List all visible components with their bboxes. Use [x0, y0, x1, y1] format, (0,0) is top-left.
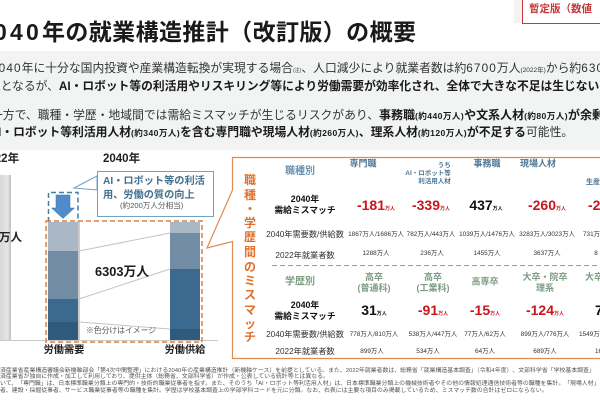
table: occupation: 現場人材: [520, 158, 556, 168]
note: ※色分けはイメージ: [86, 326, 156, 335]
employment row label: 2022年就業者数: [275, 347, 335, 356]
employment values: 1288万人: [362, 250, 390, 257]
vertical heading: 間: [244, 245, 256, 259]
table: education: 理系: [536, 283, 554, 293]
demand supply row label: 2040年需要数/供給数: [266, 330, 344, 339]
connector lines: [79, 233, 170, 329]
employment row label: 2022年就業者数: [275, 251, 335, 260]
table: education: 64万人: [475, 348, 495, 355]
draft stamp: 暫定版（数値: [529, 3, 592, 15]
table: occupation: 1455万人: [474, 250, 500, 257]
table: occupation: 437万人: [469, 197, 503, 213]
demand supply row label: 2040年需要数/供給数: [266, 230, 344, 239]
supply bar: [170, 222, 200, 340]
column headers: 高卒: [365, 272, 383, 282]
callout pointer: [74, 176, 97, 190]
footnotes: 済産業省が独自に作成・加工して利用しており、提供主体（総務省、文部科学省）が作成・公表している統計等とは異なる。: [0, 374, 329, 380]
table: occupation: 8: [594, 250, 598, 257]
table: education: 高専卒: [471, 276, 499, 286]
table: education: -15万人: [470, 302, 500, 318]
table: education: [266, 272, 600, 356]
table: occupation: AI・ロボット等: [405, 170, 451, 177]
blue callout: AI・ロボット等の利活: [103, 176, 205, 187]
vertical heading: [244, 173, 256, 344]
vertical heading: ッ: [244, 317, 256, 331]
column headers: (普通科): [358, 283, 390, 293]
table: education: (工業科): [416, 283, 450, 293]
vertical heading: 種: [244, 188, 256, 202]
year label 2040: 2040年: [103, 153, 140, 165]
blue callout: [97, 171, 214, 217]
education heading: 学歴別: [285, 276, 315, 288]
table: occupation: 利活用人材: [418, 178, 451, 185]
blue callout: 用、労働の質の向上: [103, 190, 195, 201]
mismatch row label: 需給ミスマッチ: [274, 311, 336, 321]
mismatch values: 31万人: [361, 302, 387, 318]
demand bar: [48, 222, 80, 340]
vertical heading: の: [244, 260, 256, 274]
footnotes: [0, 366, 599, 394]
mismatch row label: 需給ミスマッチ: [274, 205, 336, 215]
vertical heading: 歴: [244, 230, 256, 244]
table: occupation: 236万人: [420, 250, 444, 257]
employment values: 899万人: [360, 348, 384, 355]
table: occupation: 782万人/443万人: [407, 231, 455, 238]
summary line 4: I・ロボット等利活用人材(約340万人)を含む専門職や現場人材(約260万人)、理系人材(約120万人)が不足する可能性。: [0, 125, 573, 139]
column headers: 専門職: [349, 158, 377, 168]
mismatch row label: [274, 194, 336, 215]
occupation heading: 職種別: [285, 166, 315, 177]
table: education: 77万人/62万人: [464, 331, 506, 338]
table: occupation: 3283万人/3023万人: [519, 231, 575, 238]
table: education: 538万人/447万人: [409, 331, 457, 338]
draft stamp: [522, 0, 600, 24]
vertical heading: マ: [244, 303, 256, 317]
mismatch row label: 2040年: [291, 300, 319, 310]
table: occupation: -339万人: [412, 197, 450, 213]
summary line 3: 一方で、職種・学歴・地域間では需給ミスマッチが生じるリスクがあり、事務職(約440万人)や文系人材(約80万人)が余剰: [0, 108, 600, 122]
vertical heading: 職: [244, 173, 256, 187]
table: occupation: 1039万人/1476万人: [459, 231, 515, 238]
table: education: 大卒・院卒: [522, 272, 568, 282]
dashed divider: [272, 264, 600, 266]
demand supply values: 1867万人/1686万人: [348, 231, 404, 238]
axis: [0, 340, 218, 342]
table: education: -91万人: [418, 302, 448, 318]
vertical heading: ・: [244, 202, 256, 216]
demand supply values: 778万人/810万人: [350, 331, 398, 338]
mismatch row label: [274, 300, 336, 321]
vertical heading: 学: [244, 216, 256, 230]
table: occupation: うち: [438, 162, 451, 169]
table: occupation: 3637万人: [534, 250, 560, 257]
dashed box: efficiency: [48, 192, 78, 222]
table: occupation: 事務職: [473, 158, 501, 168]
table: occupation: -260万人: [528, 197, 566, 213]
dashed box: mismatch region: [46, 221, 202, 342]
footnotes: 者、建設・採掘従事者、サービス職業従事者等の職種を集計。学歴は学校基本調査上の学部学科コードを元に分類。なお、右表には主要な項目のみ掲載しているため、ミスマッチ数の合計はゼロにならない。: [0, 388, 547, 394]
icon: down arrow: [52, 195, 74, 218]
axis label demand: 労働需要: [44, 345, 84, 356]
value 2040: 6303万人: [95, 264, 149, 279]
summary line 2: 人となるが、AI・ロボット等の利活用やリスキリング等により労働需要が効率化され、全体で大きな不足は生じない: [0, 80, 599, 93]
table: education: 534万人: [416, 348, 440, 355]
table: education: 高卒: [424, 272, 442, 282]
axis label supply: 労働供給: [165, 345, 205, 356]
footnotes: 済産業省産業構造審議会新機軸部会「第4次中間整理」における2040年の産業構造推計（新機軸ケース）を前提としている。また、2022年就業者数は、総務省「就業構造基本調査」（令和4年度）、文部科学省「学校基本調査」: [0, 368, 595, 374]
mismatch values: -181万人: [357, 197, 395, 213]
blue callout: (約200万人分相当): [120, 201, 183, 210]
summary panel: [0, 51, 600, 150]
vertical heading: チ: [244, 330, 256, 344]
table: education: -124万人: [526, 302, 564, 318]
vertical heading: ミ: [244, 274, 256, 288]
mismatch row label: 2040年: [291, 194, 319, 204]
bar 2022: [0, 175, 11, 340]
column headers: [358, 272, 390, 293]
footnotes: いて、「専門職」は、日本標準職業分類上の専門的・技術的職業従事者を指す。また、そのうち「AI・ロボット等利活用人材」は、日本標準職業分類上の機械技術者やその他の情報処理通信技術者等の職種を集計。「現場人材」: [0, 381, 599, 387]
table: education: 899万人/776万人: [521, 331, 569, 338]
panel pointer and border: [207, 158, 600, 358]
table: occupation: [266, 158, 600, 260]
table: education: 689万人: [533, 348, 557, 355]
vertical heading: ス: [244, 288, 256, 302]
